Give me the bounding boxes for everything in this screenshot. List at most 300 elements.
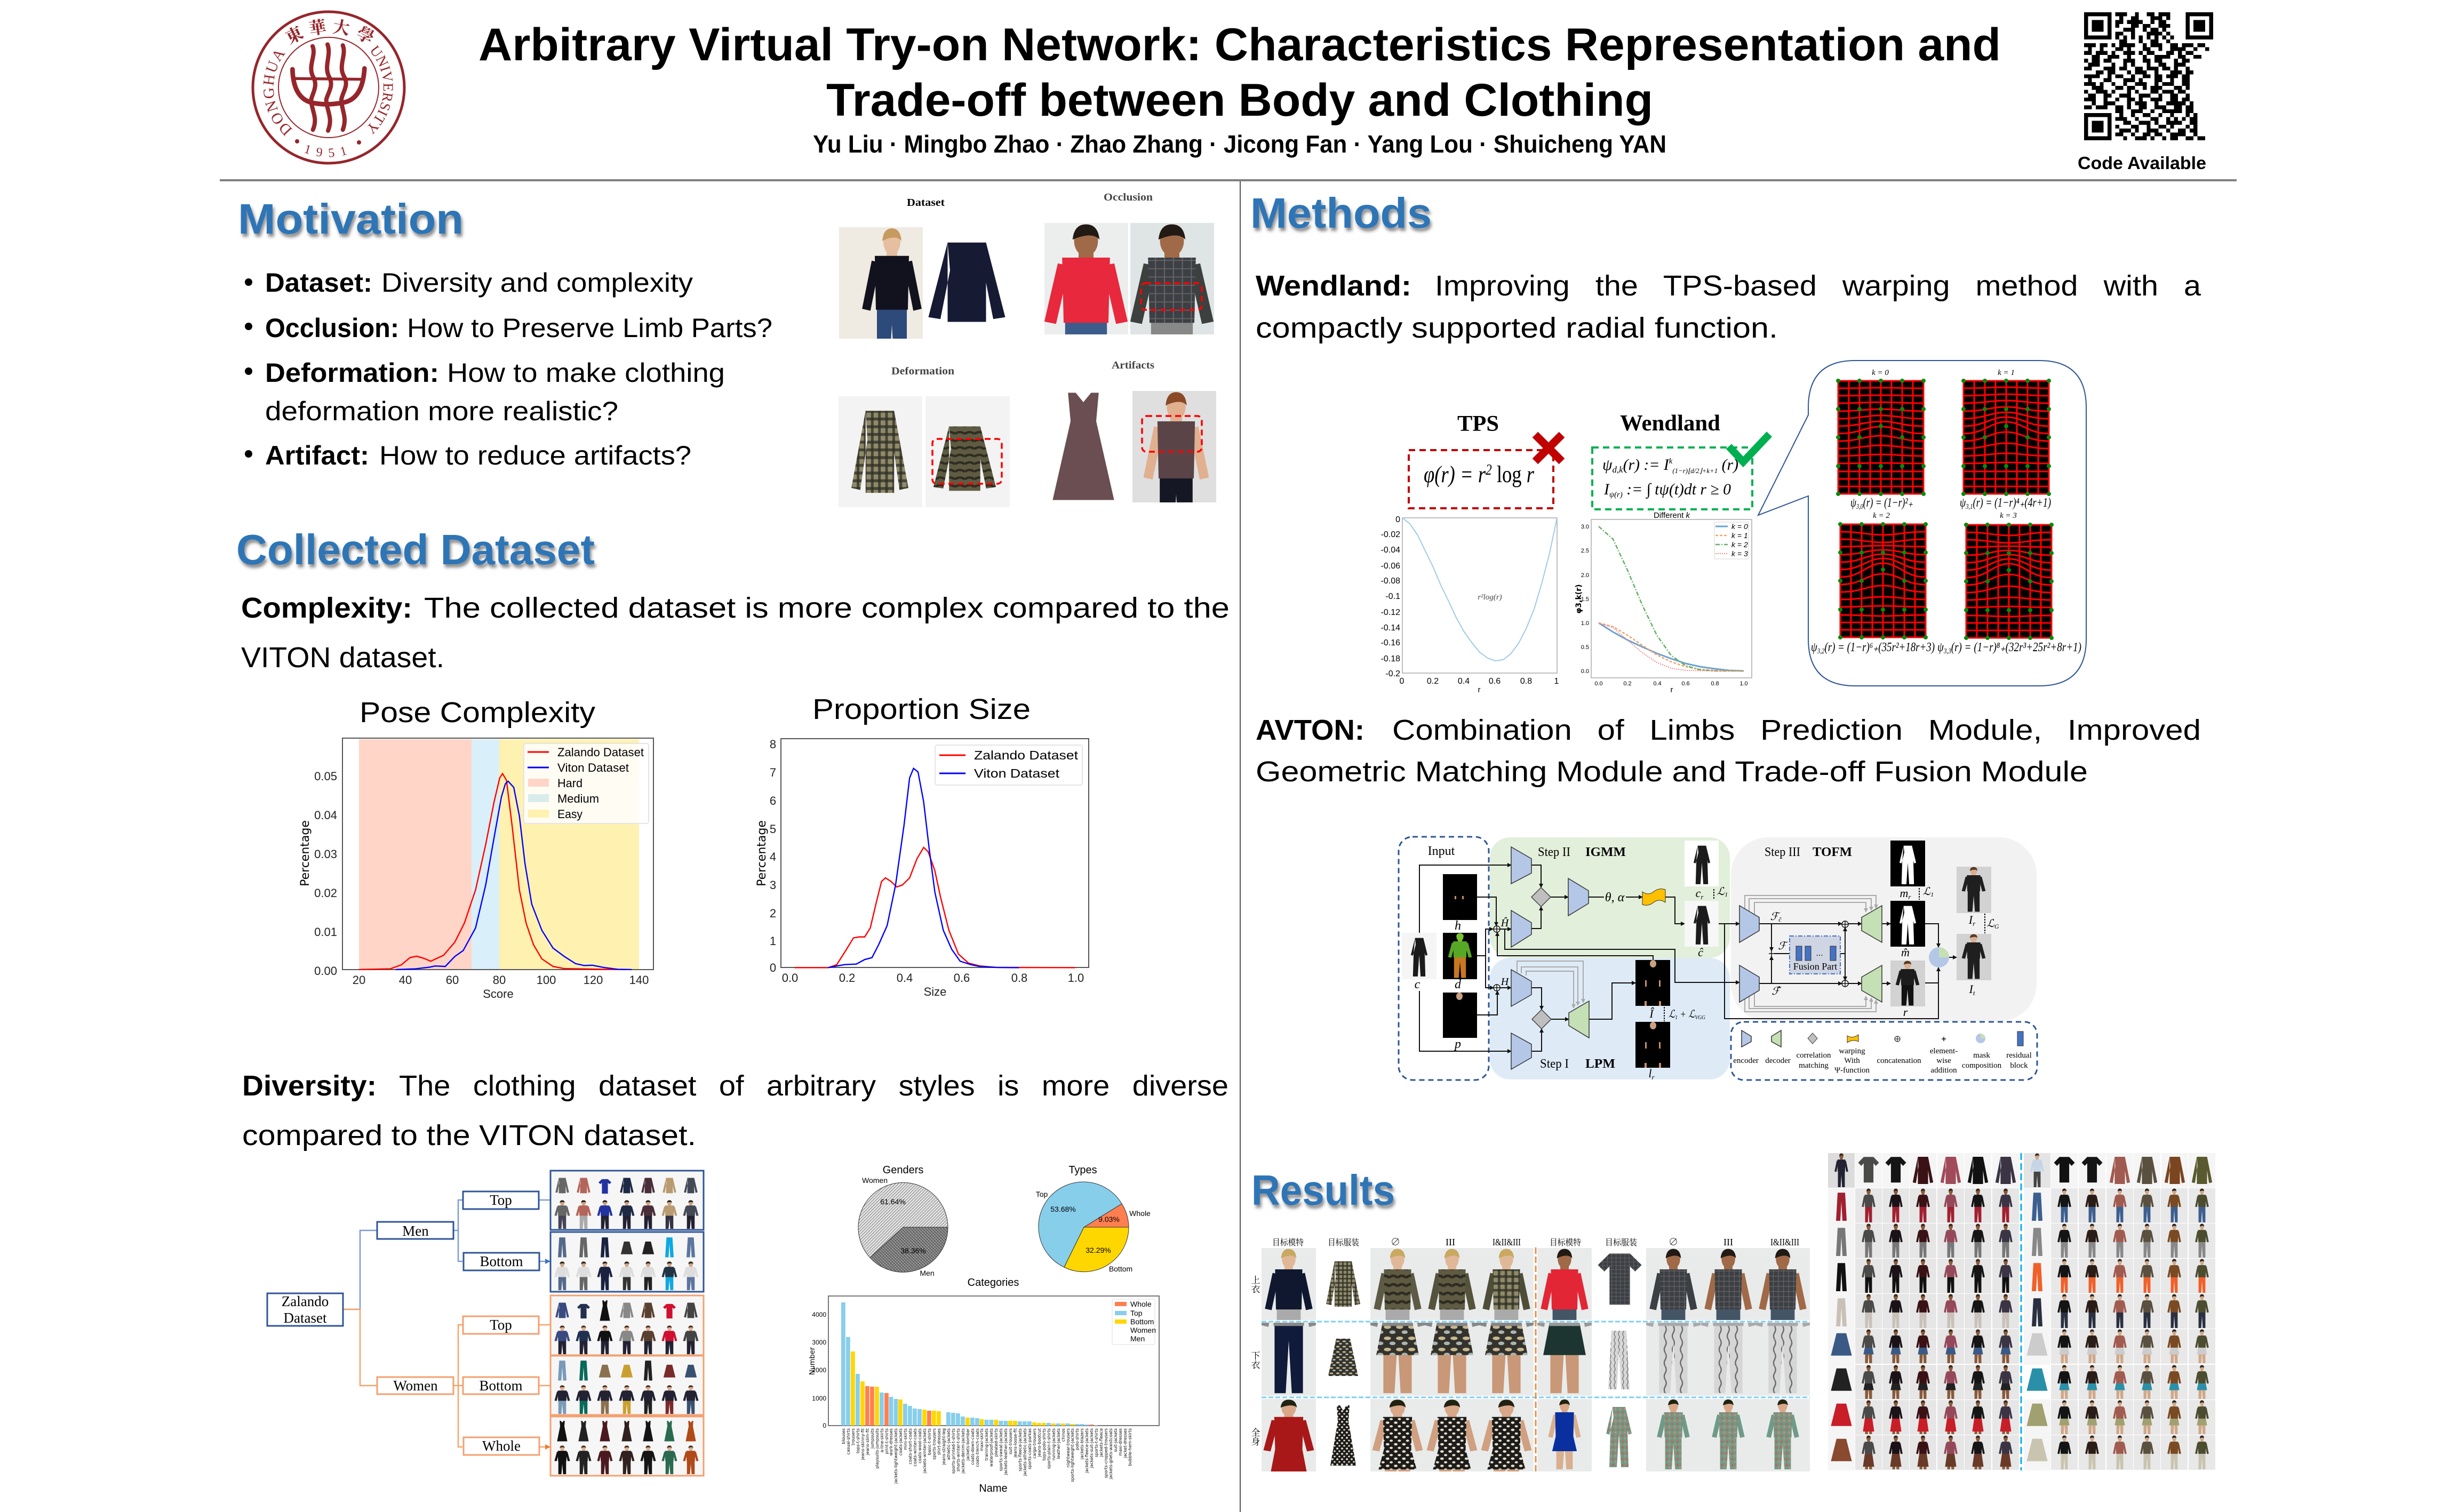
fusion outputs: r: [1973, 919, 1976, 927]
warp outputs: c: [1696, 886, 1701, 900]
chart: Wendland kernels: 0.6: [1681, 681, 1690, 687]
chart: Wendland kernels: 2.0: [1581, 572, 1589, 579]
category names: training-jackets: [984, 1428, 989, 1460]
try-on results: [2051, 1188, 2215, 1470]
row labels: 全: [1251, 1428, 1260, 1438]
row: whole garments: [1267, 1399, 1797, 1494]
fusion outputs: ĉ: [1778, 916, 1782, 923]
chart: Wendland kernels: 0.8: [1711, 681, 1719, 687]
chart: Wendland kernels: k = 1: [1731, 531, 1748, 540]
legend: Easy: [557, 807, 582, 821]
category names: jumpsuits: [870, 1428, 875, 1449]
category names: coats-winter-coats: [913, 1428, 917, 1467]
skip connections: [1517, 895, 1876, 1012]
text block: AVTON: Combination of Limbs Prediction Module, Improved: [1392, 714, 2201, 746]
legend icons and labels: element-: [1930, 1047, 1958, 1055]
axis labels: 2: [770, 907, 776, 920]
category names: print-t-shirts: [884, 1428, 889, 1454]
text block: motivation bullets: deformation more realistic?: [265, 396, 618, 426]
panel: TPS vs Wendland: [1381, 361, 2086, 694]
bars: whole: [865, 1386, 1094, 1426]
formula box: Wendland: := ∫ tψ(t)dt r ≥ 0: [1623, 481, 1731, 499]
fusion outputs: ℒ: [1986, 918, 1994, 930]
legend icons and labels: addition: [1930, 1066, 1957, 1075]
axis labels: 3: [770, 878, 776, 892]
category names: running-jackets: [1051, 1428, 1056, 1460]
photo panel: women top: [550, 1295, 704, 1355]
logo: Donghua University seal: 1951: [304, 145, 347, 157]
formula box: Wendland: I: [1604, 481, 1609, 498]
pie chart: Types: 53.68%: [1050, 1205, 1076, 1213]
grid: k=1: ψ: [1960, 496, 1968, 510]
category names: jackets-gilets-waistcoats: [1108, 1428, 1113, 1480]
axis labels: 1: [770, 934, 776, 948]
grid: k=2: 3,2: [1817, 647, 1825, 655]
y axis labels: 3000: [812, 1339, 826, 1346]
chart: TPS kernel: r²log(r): [1478, 593, 1502, 602]
chart: Wendland kernels: r: [1671, 685, 1673, 694]
legend: [524, 743, 649, 823]
text block: complexity: VITON dataset.: [241, 642, 444, 674]
formula box: Wendland: k: [1669, 457, 1673, 466]
category names: shirt-dresses: [937, 1428, 941, 1455]
axis labels: 6: [770, 794, 776, 807]
category names: work-dresses: [889, 1428, 893, 1455]
category names: jackets-leather-jackets: [1003, 1428, 1008, 1476]
axis labels: 0.00: [314, 964, 337, 978]
legend: Zalando Dataset: [557, 746, 644, 759]
axis labels: 0.0: [782, 971, 798, 985]
legend: Medium: [557, 792, 599, 805]
pie chart: Types: 32.29%: [1086, 1246, 1111, 1254]
text block: complexity: The collected dataset is more complex compared to the: [424, 592, 1230, 624]
category names: jackets-bomber: [965, 1428, 970, 1461]
category names: waterproof-jackets: [989, 1428, 994, 1467]
formula box: Wendland: ψ(r): [1609, 491, 1623, 499]
category names: a-line-skirts: [880, 1428, 884, 1453]
axis labels: 4: [770, 850, 776, 863]
panel: LPM background: [1490, 958, 1730, 1079]
tree connectors: [343, 1200, 550, 1447]
category names: chinos: [1061, 1428, 1066, 1442]
authors: Yu Liu · Mingbo Zhao · Zhao Zhang · Jicong Fan · Yang Lou · Shuicheng YAN: [813, 130, 1666, 158]
legend: Zalando Dataset: [974, 748, 1079, 762]
category names: coats-wool-coats: [917, 1428, 922, 1463]
fusion part: [1790, 936, 1840, 974]
tree labels: Women: [393, 1378, 438, 1394]
logo: Donghua University seal: UNIVERSITY: [368, 45, 393, 134]
text block: motivation bullets: Occlusion:: [265, 313, 399, 343]
chart: TPS kernel: 0: [1395, 515, 1400, 524]
category names: suit-trousers: [1008, 1428, 1013, 1454]
legend: [935, 745, 1082, 785]
category names: [841, 1428, 1132, 1484]
chart: Wendland kernels: 3.0: [1581, 524, 1589, 530]
formula box: TPS: 2: [1486, 462, 1492, 478]
warp outputs: r: [1701, 893, 1704, 901]
warp outputs: ℒ: [1717, 886, 1725, 898]
legend: Women: [1130, 1326, 1156, 1334]
grid: k=3: k = 3: [2000, 511, 2017, 520]
category names: jackets-lightweight-jackets: [893, 1428, 898, 1484]
diagram: Zalando dataset tree: [267, 1171, 704, 1476]
chart: Wendland kernels: 0.4: [1653, 681, 1662, 687]
chart: TPS kernel: 0.8: [1520, 677, 1532, 686]
category names: nightwear-trousers: [1066, 1428, 1071, 1467]
text block: motivation bullets: Dataset:: [265, 268, 372, 298]
lower garments column: [1828, 1188, 1855, 1470]
legend icons and labels: decoder: [1765, 1057, 1791, 1065]
row labels: [1251, 1275, 1260, 1447]
pie chart: Types: Bottom: [1109, 1265, 1132, 1273]
category names: maxi-dresses: [1118, 1428, 1123, 1456]
legend icons and labels: Ψ-function: [1834, 1066, 1870, 1075]
tree labels: [282, 1192, 523, 1454]
photo group: dataset: [839, 197, 1005, 379]
grid: k=2: [1811, 511, 1935, 655]
row labels: 上: [1251, 1275, 1260, 1285]
warp outputs: [1605, 841, 1728, 959]
category names: sports-printed-t-shirts: [951, 1428, 956, 1474]
category names: jackets-denim-jackets: [961, 1428, 965, 1474]
category names: jackets-winter-jackets: [922, 1428, 927, 1474]
formula box: Wendland: [1592, 447, 1752, 509]
chart: TPS kernel: r: [1478, 685, 1481, 694]
callout: warped grids: [1758, 361, 2086, 686]
legend: Bottom: [1130, 1317, 1154, 1326]
axis labels: 140: [629, 973, 649, 987]
tree labels: Zalando: [282, 1293, 329, 1309]
formula box: Wendland: ψ: [1602, 456, 1613, 474]
row labels: 身: [1251, 1437, 1260, 1447]
category names: polo-shirts: [1075, 1428, 1080, 1450]
module titles: [1428, 844, 1852, 1071]
row labels: 下: [1251, 1351, 1260, 1361]
cell backgrounds: [1262, 1248, 1810, 1471]
grid: k=1: (r) = (1−r)⁴₊(4r+1): [1973, 496, 2051, 510]
chart: Wendland kernels: 2.5: [1581, 548, 1589, 554]
axis labels: 0.04: [314, 809, 337, 822]
logo: Donghua University seal: 學: [353, 22, 377, 48]
legend icons and labels: wise: [1936, 1057, 1951, 1065]
bar chart: Categories: Categories: [968, 1277, 1019, 1289]
axis labels: 7: [770, 766, 776, 779]
fusion outputs: 1: [1930, 891, 1934, 898]
panel: TOFM background: [1731, 837, 2037, 1021]
axis labels: Percentage: [299, 820, 312, 886]
category names: leather-jackets: [1056, 1428, 1061, 1459]
category names: tops-polo-shirts: [1042, 1428, 1047, 1461]
chart: Wendland kernels: k = 3: [1731, 549, 1748, 558]
category names: jeans-slim-fit: [865, 1428, 870, 1455]
tree labels: Bottom: [479, 1378, 523, 1394]
pie chart: Types: [1036, 1164, 1151, 1273]
network blocks: [1511, 847, 1949, 1069]
category names: pleated-skirts: [994, 1428, 999, 1457]
bar chart: Categories: Name: [979, 1483, 1008, 1494]
limb outputs: 1: [1675, 1014, 1678, 1021]
axis labels: Size: [924, 985, 946, 998]
panel: IGMM background: [1490, 837, 1730, 958]
chart: Wendland kernels: 0.0: [1581, 668, 1589, 675]
category names: jackets-blazers: [1080, 1428, 1084, 1460]
grid: k=3: (r) = (1−r)⁸₊(32r³+25r²+8r+1): [1951, 641, 2081, 654]
legend icons and labels: With: [1844, 1057, 1860, 1065]
chart: Wendland kernels: 0.0: [1594, 681, 1603, 687]
category names: sports-coats-parkas: [1027, 1428, 1032, 1469]
chart: Wendland kernels: k = 0: [1731, 522, 1748, 531]
heading: Methods: Methods: [1250, 189, 1432, 237]
fusion outputs: ℱ: [1770, 911, 1778, 923]
formula box: Wendland: (1−r)⌊d/2⌋+k+1: [1672, 467, 1718, 475]
row and column separators: [1262, 1322, 1810, 1397]
axis labels: Percentage: [755, 820, 769, 886]
text block: diversity: Diversity:: [242, 1070, 377, 1102]
chart: Pose Complexity: [299, 697, 653, 1001]
axis labels: 100: [537, 973, 556, 987]
y axis labels: Number: [809, 1347, 817, 1375]
axis labels: 0: [770, 961, 776, 974]
axis labels: [299, 770, 649, 1001]
chart: Wendland kernels: φ3,k(r): [1575, 584, 1583, 614]
grid: k=0: 3,0: [1856, 503, 1863, 511]
tree nodes: [267, 1191, 539, 1455]
heading: TPS: TPS: [1457, 412, 1499, 436]
grid: k=0: (r) = (1−r)²₊: [1863, 496, 1913, 510]
legend icons and labels: warping: [1839, 1047, 1865, 1055]
text block: motivation bullets: How to make clothing: [447, 358, 725, 388]
category names: jacket-dresses: [1123, 1428, 1128, 1459]
legend icons and labels: block: [2010, 1061, 2028, 1070]
category names: sports-plain-t-shirts: [1047, 1428, 1051, 1469]
chart: Wendland kernels: 0.2: [1623, 681, 1632, 687]
fusion part: Fusion Part: [1793, 961, 1837, 972]
fusion outputs: ℱ: [1778, 940, 1788, 952]
chart: Proportion Size: [755, 693, 1089, 998]
formula box: Wendland: d,k: [1612, 465, 1623, 475]
grid: k=2: k = 2: [1873, 511, 1890, 520]
text block: Wendland: Wendland:: [1256, 270, 1411, 302]
tree labels: Men: [402, 1223, 429, 1239]
chart: Wendland kernels: [1575, 511, 1752, 694]
category names: sports-lightweight-jackets: [1070, 1428, 1075, 1482]
heading: Motivation: Motivation: [238, 195, 464, 243]
legend icons and labels: residual: [2006, 1051, 2032, 1060]
axis labels: 80: [493, 973, 506, 987]
photo panel: women whole: [550, 1417, 704, 1476]
tree labels: Top: [490, 1317, 512, 1333]
bars: top: [841, 1302, 1098, 1426]
column headers: 目标服装: [1328, 1238, 1359, 1247]
axis labels: 60: [446, 973, 459, 987]
fusion outputs: ℒ: [1923, 886, 1930, 898]
pie chart: Types: Whole: [1129, 1209, 1151, 1218]
row labels: 衣: [1251, 1360, 1260, 1370]
pie chart: Types: 9.03%: [1098, 1215, 1120, 1223]
legend: Viton Dataset: [974, 766, 1060, 780]
panel: results matrix, men: [2024, 1153, 2215, 1470]
legend icons and labels: mask: [1973, 1051, 1990, 1060]
chart: TPS kernel: 0: [1400, 677, 1404, 686]
legend: Whole: [1130, 1300, 1152, 1308]
input images: d: [1455, 978, 1462, 991]
panel: input frame: [1399, 837, 1489, 1080]
axis labels: 120: [584, 973, 603, 987]
grid: k=3: [1937, 511, 2081, 655]
axis labels: 0.03: [314, 847, 337, 861]
category names: tops-t-shirts: [856, 1428, 860, 1453]
legend icons and labels: concatenation: [1877, 1057, 1921, 1065]
data flow arrows: [1419, 865, 1957, 1051]
fusion outputs: ℱ̂: [1771, 986, 1782, 997]
grid: k=0: ψ: [1850, 496, 1858, 510]
chart: Wendland kernels: 1.5: [1581, 596, 1589, 603]
category names: athletic-jackets: [946, 1428, 951, 1460]
column headers: ∅: [1669, 1237, 1678, 1247]
column headers: ∅: [1391, 1237, 1400, 1247]
chart: TPS kernel: -0.16: [1381, 638, 1400, 647]
category names: coats-trench-coats: [975, 1428, 980, 1467]
y axis labels: 0: [823, 1422, 826, 1429]
chart: Wendland kernels: 1.0: [1739, 681, 1748, 687]
grid: k=1: [1960, 369, 2051, 511]
grid: k=0: k = 0: [1872, 369, 1889, 377]
text block: motivation bullets: How to Preserve Limb Parts?: [407, 313, 772, 343]
logo: Donghua University seal: 東: [283, 23, 306, 48]
legend: Men: [1130, 1334, 1145, 1343]
category names: trousers: [851, 1428, 856, 1445]
warp outputs: 1: [1725, 891, 1728, 898]
concat and add nodes: [1494, 921, 1848, 991]
photo group: deformation: Deformation: [891, 365, 954, 377]
category names: playsuits-jumpsuits: [875, 1428, 880, 1469]
column headers: I&II&III: [1493, 1237, 1521, 1247]
pie chart: Genders: Genders: [883, 1164, 923, 1176]
pie chart: Genders: Men: [920, 1269, 935, 1277]
limb outputs: Î: [1649, 1007, 1654, 1020]
column headers: 目标模特: [1550, 1237, 1581, 1247]
category names: mini-skirts: [903, 1428, 908, 1450]
photo group: occlusion: [1044, 191, 1214, 406]
title: Trade-off between Body and Clothing: [826, 75, 1653, 126]
row: lower garments: [1264, 1246, 1807, 1393]
icon: QR code: [2084, 12, 2213, 140]
category names: sports-fleece-jackets: [1018, 1428, 1023, 1471]
text block: motivation bullets: [245, 268, 772, 470]
tree labels: Dataset: [284, 1310, 327, 1326]
text block: AVTON: [1256, 714, 2201, 788]
photo group: artifacts: Artifacts: [1112, 359, 1154, 371]
text block: diversity: The clothing dataset of arbitrary styles is more diverse: [399, 1070, 1228, 1102]
pie chart: Types: Types: [1068, 1164, 1097, 1176]
pie chart: Types: Top: [1036, 1190, 1048, 1198]
legend icons and labels: correlation: [1797, 1051, 1831, 1060]
text block: motivation bullets: Diversity and complexity: [381, 268, 693, 298]
chart: TPS kernel: -0.06: [1381, 562, 1400, 571]
logo: Donghua University seal: DONGHUA: [264, 51, 292, 137]
icon: red cross: [1535, 435, 1562, 461]
column divider: [1240, 181, 1241, 1512]
pie chart: Genders: 61.64%: [880, 1197, 906, 1206]
input images: H: [1501, 976, 1510, 988]
icon: green check: [1729, 434, 1769, 462]
fusion outputs: [1770, 841, 1999, 1019]
warp outputs: θ, α: [1605, 891, 1625, 905]
grid: k=1: k = 1: [1998, 369, 2015, 377]
category names: shorts-winter-t-shirts: [956, 1428, 961, 1471]
chart: TPS kernel: -0.12: [1381, 608, 1400, 617]
lower garments column: [2024, 1188, 2050, 1470]
photo group: deformation: [839, 365, 1010, 507]
axis labels: 5: [770, 822, 776, 836]
limb outputs: VGG: [1695, 1014, 1705, 1021]
formula box: Wendland: (r) := I: [1623, 456, 1670, 474]
photo panel: men bottom: [550, 1232, 704, 1292]
legend icons and labels: encoder: [1733, 1057, 1759, 1065]
grid: k=3: 3,3: [1943, 647, 1951, 655]
bars: bottom: [851, 1351, 1074, 1426]
category names: jeans-straight-leg: [941, 1428, 946, 1466]
category names: cargo-trousers: [1032, 1428, 1037, 1459]
category names: sports-sweat-jackets: [999, 1428, 1003, 1471]
category names: sports-cropped-trousers: [1104, 1428, 1108, 1478]
chart: Pose Complexity: Pose Complexity: [360, 697, 595, 729]
density curves: [794, 769, 1075, 967]
fusion part: ...: [1816, 949, 1823, 958]
input images: c: [1415, 978, 1420, 991]
text block: AVTON: AVTON:: [1256, 714, 1364, 746]
y axis labels: 4000: [812, 1311, 826, 1318]
module titles: Step II: [1538, 845, 1570, 859]
text block: Wendland: [1256, 270, 2201, 344]
axis labels: 8: [770, 738, 776, 751]
category names: sports-trousers: [932, 1428, 937, 1460]
axis labels: 0.01: [314, 925, 337, 939]
pie chart: Genders: 38.36%: [900, 1246, 926, 1255]
category names: jeans-loose-fit: [1013, 1428, 1018, 1458]
tree labels: Bottom: [480, 1253, 523, 1269]
fusion outputs: r: [1908, 893, 1911, 901]
chart: TPS kernel: -0.04: [1381, 546, 1400, 555]
chart: TPS kernel: -0.08: [1381, 577, 1400, 586]
category names: blouses: [841, 1428, 846, 1444]
module titles: Step I: [1540, 1057, 1569, 1071]
text block: Wendland: Improving the TPS-based warping method with a: [1435, 270, 2201, 302]
logo: Donghua University seal: 華: [308, 17, 328, 38]
chart: TPS kernel: 0.6: [1489, 677, 1501, 686]
chart: TPS kernel: -0.1: [1385, 592, 1400, 601]
category names: jackets-fleece-jackets: [1084, 1428, 1089, 1474]
column headers: III: [1723, 1237, 1733, 1247]
category names: jackets-athletic-jackets: [1023, 1428, 1027, 1477]
photo panel: men top: [550, 1171, 704, 1230]
difficulty bands: [359, 739, 639, 970]
legend: [1112, 1299, 1156, 1345]
fusion outputs: I: [1969, 913, 1973, 926]
text block: motivation bullets: How to reduce artifacts?: [379, 441, 691, 470]
logo: Donghua University seal: 大: [331, 17, 351, 38]
category names: maxi-skirts: [979, 1428, 984, 1451]
text block: diversity: compared to the VITON dataset.: [242, 1119, 696, 1151]
axis labels: 0.05: [314, 770, 337, 783]
column headers: 目标服装: [1605, 1238, 1637, 1247]
chart: TPS kernel: 0.4: [1458, 677, 1470, 686]
title: [478, 19, 2001, 126]
axis labels: 0.02: [314, 886, 337, 900]
tree labels: Whole: [482, 1438, 521, 1454]
formula box: TPS: r: [1527, 461, 1536, 487]
category names: jackets-suit-jackets: [1089, 1428, 1094, 1469]
